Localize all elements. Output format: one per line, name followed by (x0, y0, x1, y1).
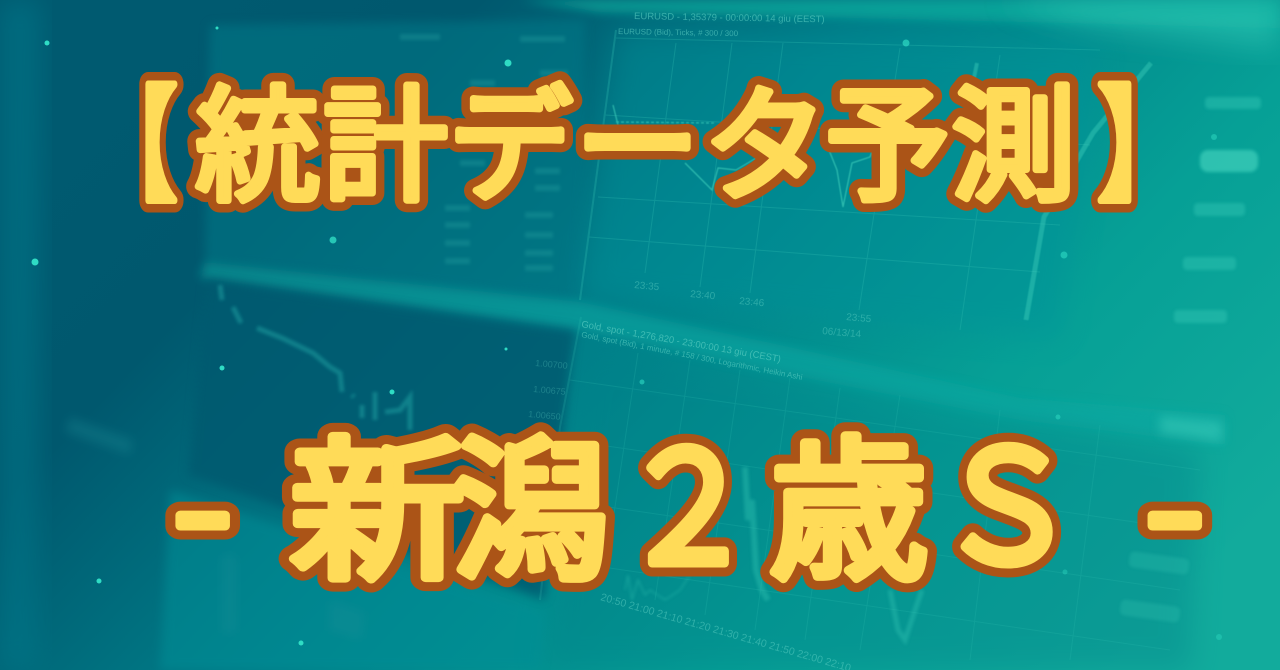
lower left price line (220, 285, 410, 430)
chart screen labels: 23:46 (739, 296, 765, 309)
blurred left column rows (65, 417, 365, 640)
upper chart panel (582, 30, 1100, 340)
subtitle: - 新潟2歳S -: 歳 (769, 387, 929, 611)
title: 【統計データ予測】: 【 (88, 47, 178, 227)
upper price line (613, 63, 1151, 320)
bottom tabs panel (160, 490, 545, 670)
lower right chart panel (540, 350, 1200, 670)
chart screen labels: Gold, spot (Bid), 1 minute, # 158 / 300, Logarithmic, Heikin Ashi (581, 330, 803, 382)
upper left table panel (205, 20, 585, 300)
right band highlight (1160, 416, 1222, 442)
left table rows (400, 34, 568, 271)
upper-left middle band (200, 262, 1225, 445)
chart screen labels: 1.00675 (533, 384, 566, 397)
chart screen labels: EURUSD (Bid), Ticks, # 300 / 300 (618, 27, 739, 38)
chart screen labels: EURUSD - 1,35379 - 00:00:00 14 giu (EEST) (634, 11, 825, 25)
title: 【統計データ予測】: 】 (1097, 45, 1192, 226)
subtitle: - 新潟2歳S -: 歳 (769, 387, 929, 611)
right side labels (1200, 150, 1258, 172)
lower right candlesticks (625, 467, 922, 640)
top light band of the screen (520, 0, 1280, 28)
subtitle: - 新潟2歳S -: - (172, 385, 233, 609)
subtitle: - 新潟2歳S -: 潟 (451, 387, 609, 612)
chart screen labels (528, 11, 872, 670)
chart screen labels: 23:40 (690, 289, 716, 302)
subtitle: - 新潟2歳S -: ２ (618, 384, 757, 608)
subtitle: - 新潟2歳S -: 潟 (451, 387, 609, 612)
lower chart grid (540, 317, 1200, 660)
title: 【統計データ予測】: 】 (1097, 45, 1192, 226)
chart screen labels: 06/13/14 (822, 326, 862, 340)
chart screen labels: 1.00650 (528, 409, 561, 422)
chart screen labels: Gold, spot - 1,276,820 - 23:00:00 13 giu (CEST) (580, 319, 782, 365)
subtitle: - 新潟2歳S -: Ｓ (934, 383, 1079, 607)
subtitle: - 新潟2歳S -: - (172, 385, 233, 609)
subtitle: - 新潟2歳S -: Ｓ (934, 383, 1079, 607)
left screen bezel stripe (0, 0, 40, 670)
title: 【統計データ予測】: 統計データ予測 (195, 45, 1076, 226)
chart screen labels: 1.00700 (535, 358, 568, 371)
subtitle: - 新潟2歳S -: - (1145, 385, 1205, 609)
subtitle: - 新潟2歳S - (172, 383, 1205, 612)
title: 【統計データ予測】: 統計データ予測 (195, 45, 1076, 226)
chart screen labels: 23:35 (634, 280, 660, 293)
subtitle: - 新潟2歳S -: 新 (289, 386, 466, 611)
subtitle: - 新潟2歳S -: - (1145, 385, 1205, 609)
subtitle: - 新潟2歳S -: 新 (289, 386, 466, 611)
subtitle: - 新潟2歳S -: ２ (618, 384, 757, 608)
title: 【統計データ予測】: 【 (88, 47, 178, 227)
chart screen labels: 23:55 (846, 312, 872, 325)
lower left chart panel (188, 280, 575, 600)
upper chart grid (580, 30, 1100, 330)
